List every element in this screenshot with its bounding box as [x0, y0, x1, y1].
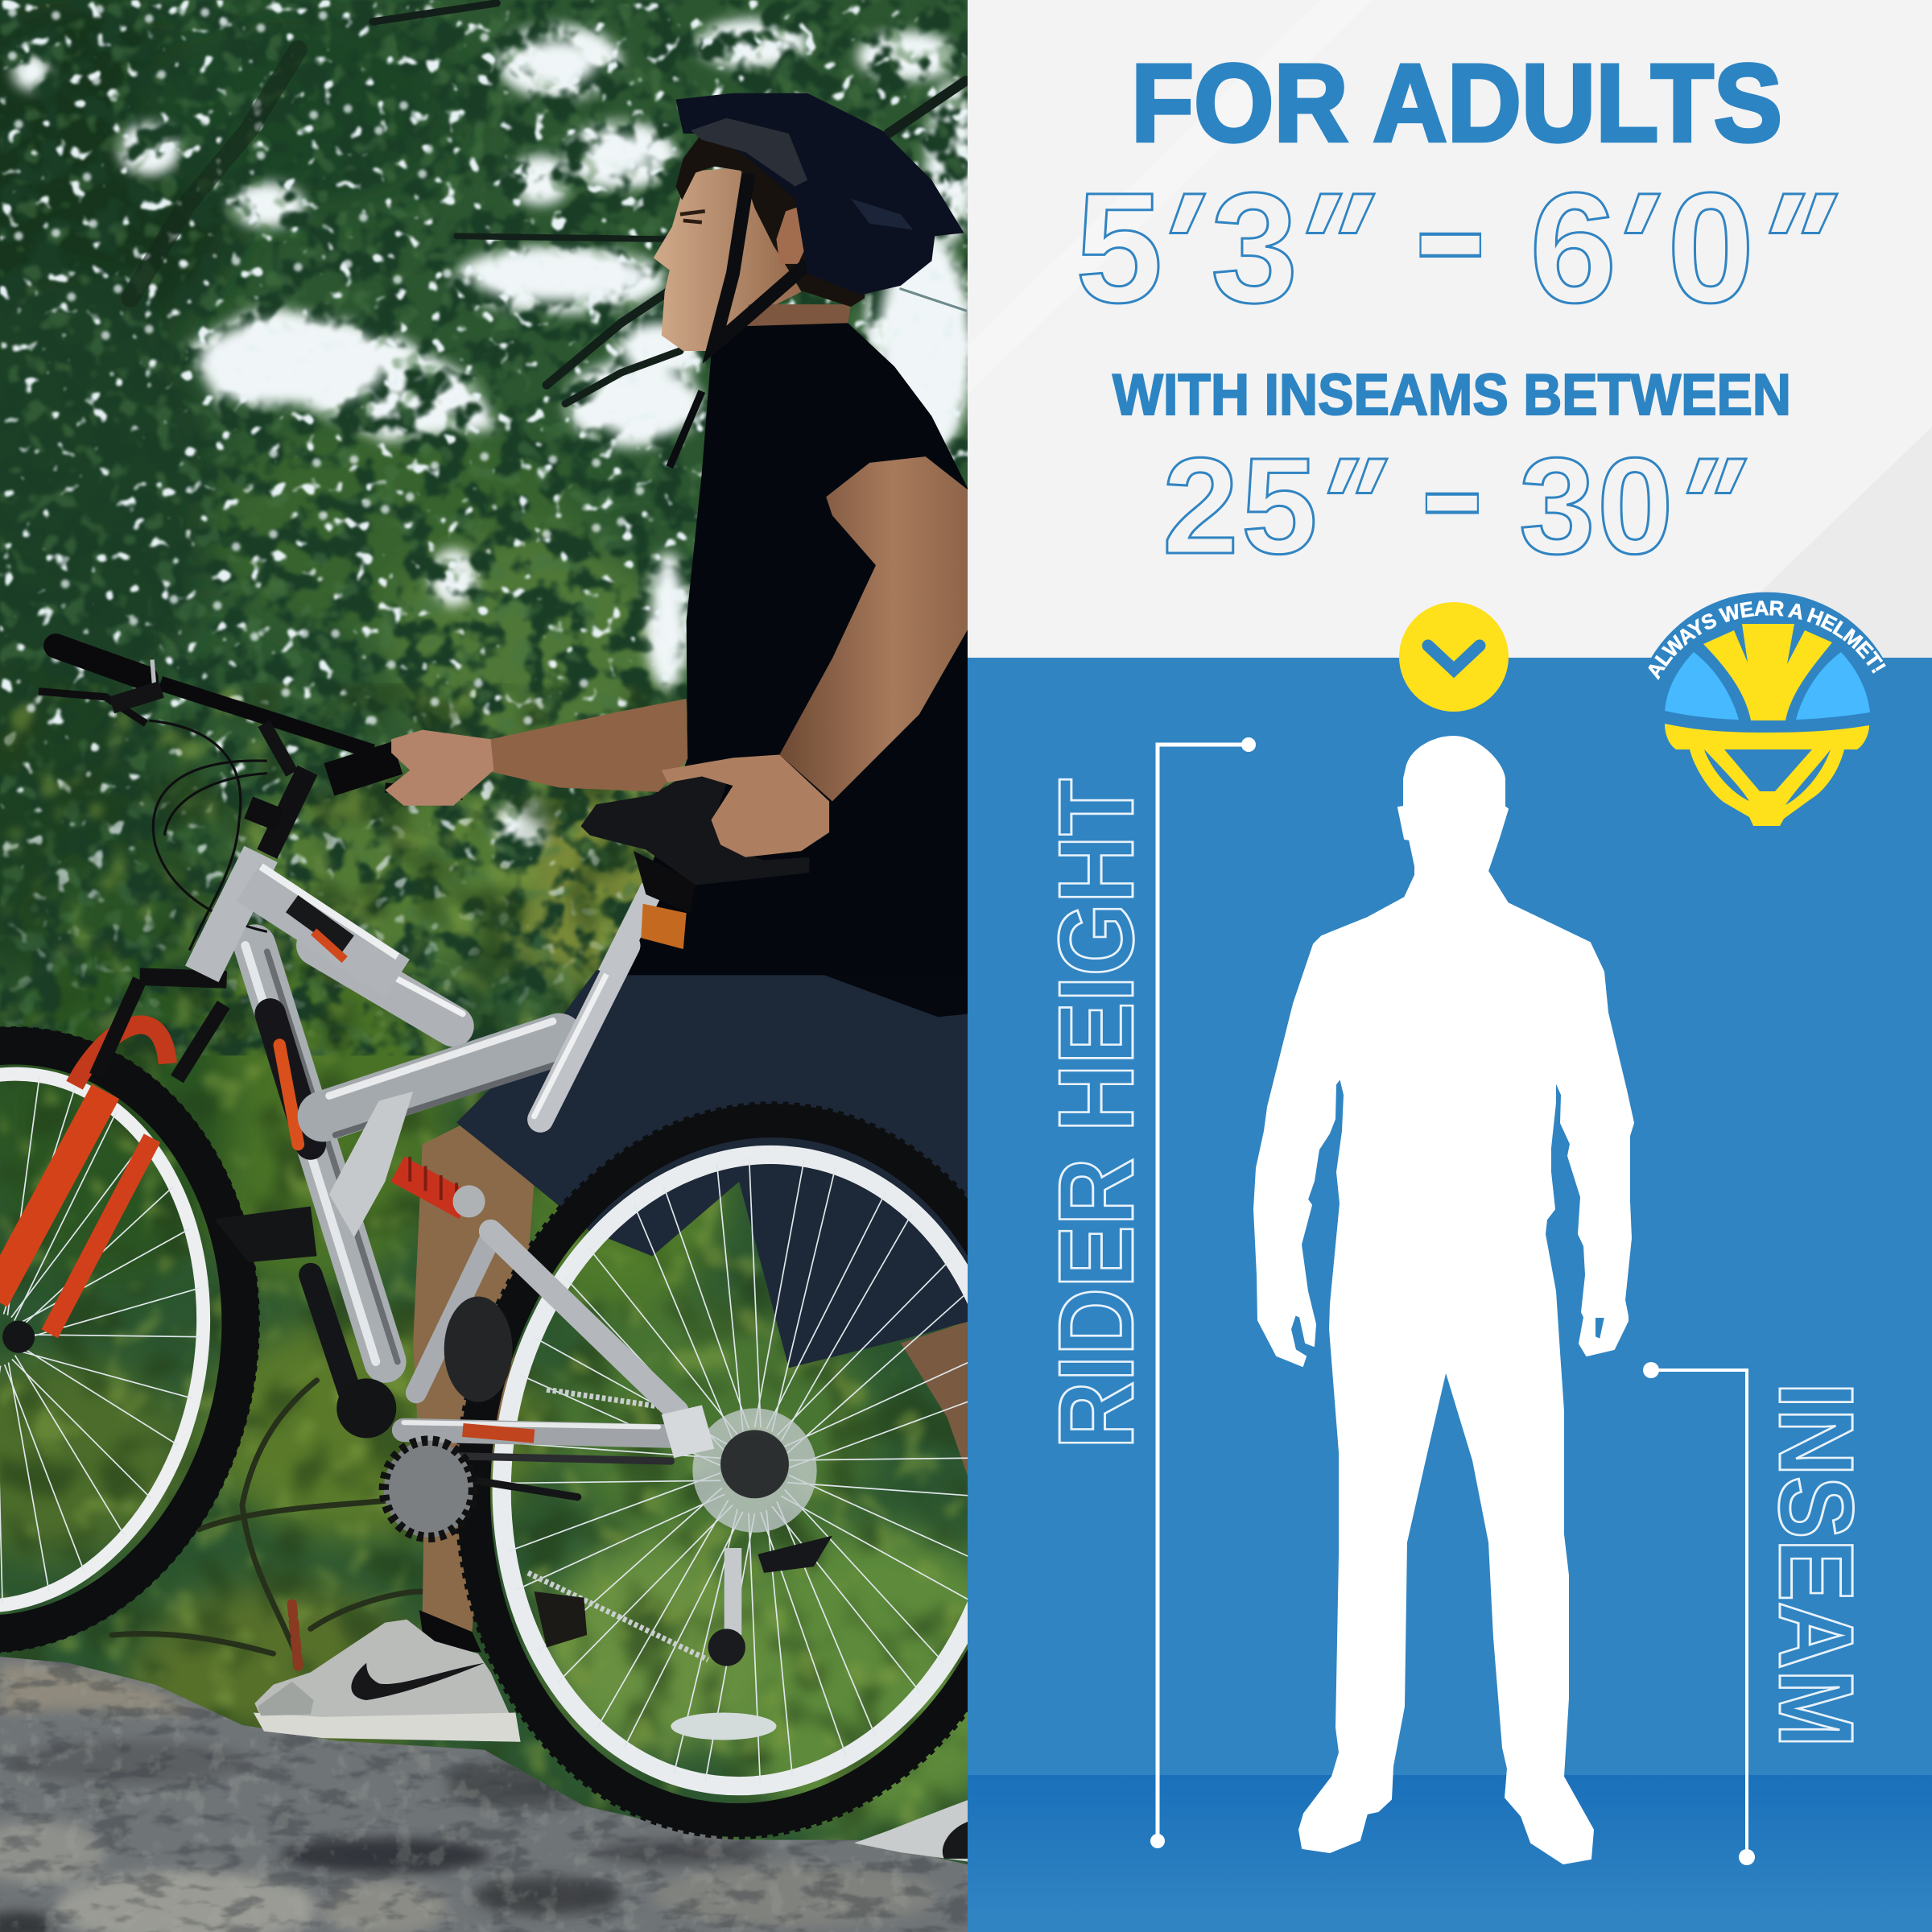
shoe detail	[254, 1620, 521, 1742]
icon: chevron circle	[1399, 602, 1509, 712]
rider height range 5'3" - 6'0"	[1079, 191, 1839, 305]
rider height measure line	[1150, 737, 1256, 1848]
rear bicycle wheel	[411, 1066, 1099, 1875]
orange suspension fork	[0, 976, 227, 1334]
badge arc text: ALWAYS WEAR A HELMET!	[1649, 601, 1886, 680]
handlebar, stem and cables	[39, 646, 652, 978]
tree branches	[130, 3, 966, 404]
second shoe at lower right	[854, 1800, 969, 1862]
silver bicycle frame	[214, 939, 714, 1538]
rider hands and forearm	[385, 699, 829, 857]
saddle and seat clamp	[580, 774, 809, 949]
heading: for adults: FOR ADULTS	[1131, 42, 1782, 165]
front bicycle wheel	[0, 996, 297, 1684]
inseam measure line	[1643, 1362, 1755, 1865]
rock	[0, 1641, 969, 1932]
icon: helmet badge	[1649, 592, 1886, 826]
lower background branches	[112, 1381, 423, 1666]
rider shirt, head, helmet and arm	[621, 93, 969, 975]
rider silhouette	[1254, 737, 1633, 1864]
label: inseam: INSEAM	[1757, 1382, 1876, 1748]
helmet	[676, 93, 964, 295]
floor band	[968, 1775, 1932, 1916]
tree foliage background	[0, 0, 1031, 1932]
face	[654, 167, 801, 351]
label: rider height: RIDER HEIGHT	[1037, 778, 1155, 1449]
heading: with inseams between: WITH INSEAMS BETWEEN	[1113, 363, 1791, 427]
panel: cyclist photo illustration	[0, 0, 968, 1932]
upper arm	[779, 456, 969, 801]
inseam range 25" - 30"	[1166, 456, 1748, 555]
rider body: legs, shorts and shoe	[254, 952, 969, 1742]
